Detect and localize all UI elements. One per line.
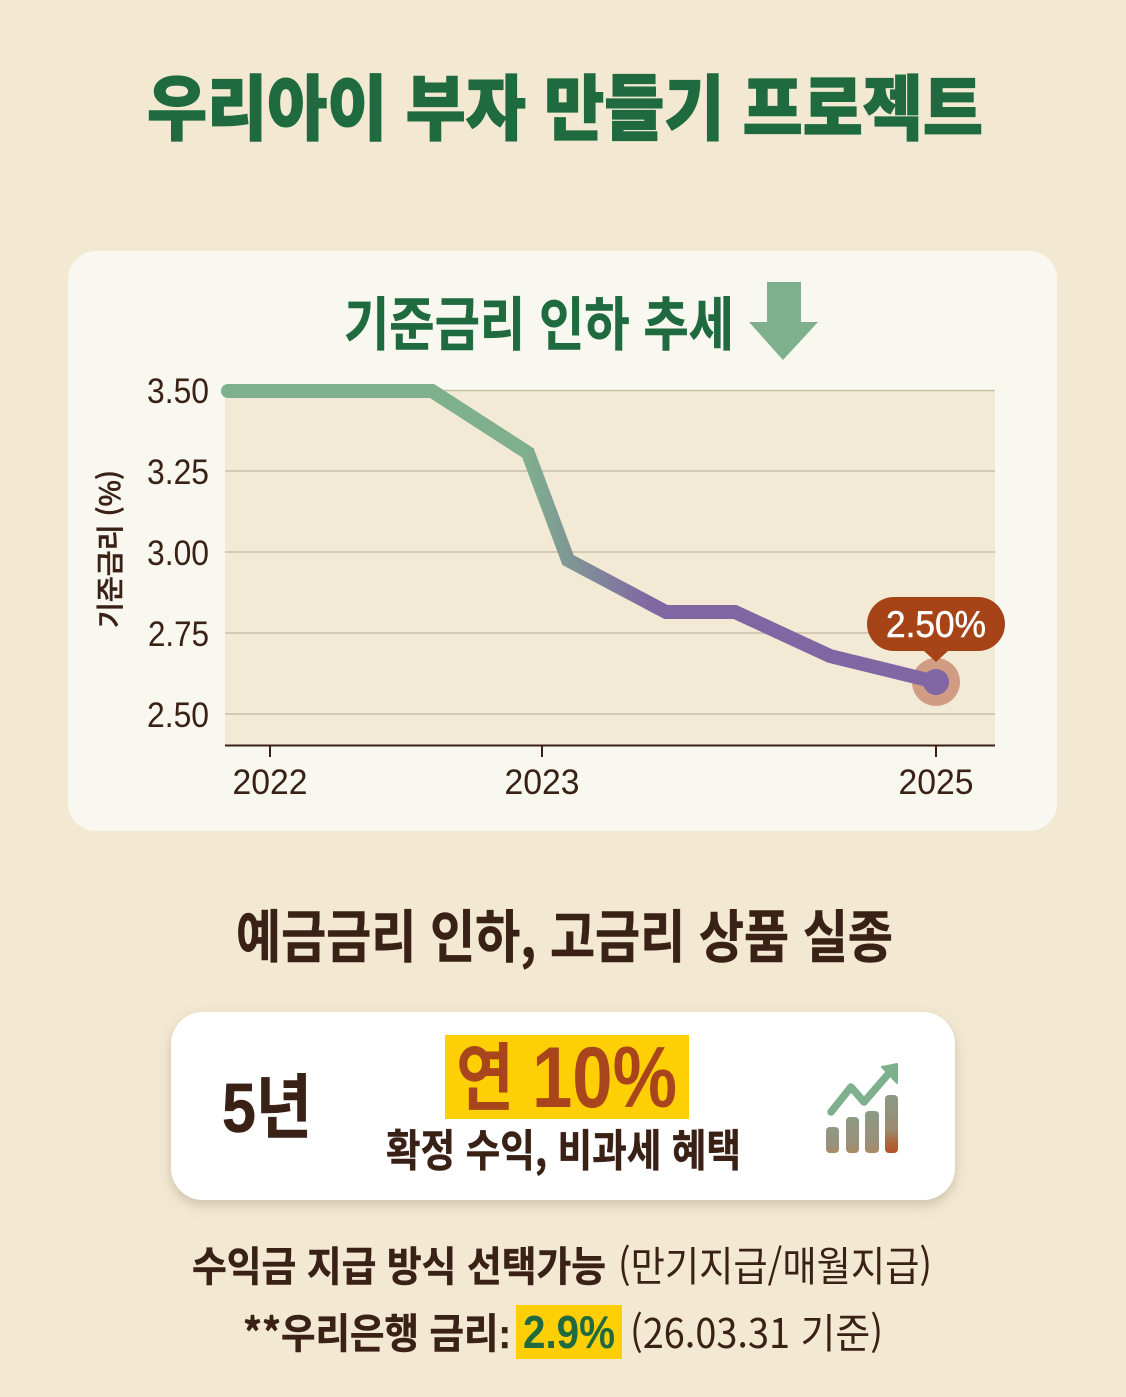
note: woori bank rate: **우리은행 금리: [243, 1300, 511, 1360]
x axis [225, 745, 995, 757]
term: 5 years: 5년 [222, 1069, 312, 1147]
y axis labels: 2.50 [147, 696, 209, 735]
highlight: annual 10%: 연 [456, 1019, 514, 1126]
note: woori bank rate [243, 1300, 883, 1360]
title: 우리아이 부자 만들기 프로젝트 [147, 53, 983, 155]
note: payout options: 수익금 지급 방식 선택가능 [192, 1233, 606, 1293]
icon: down arrow [749, 282, 818, 360]
y axis title: 기준금리 (%) [89, 470, 129, 628]
highlight: annual 10%: 10% [532, 1030, 677, 1126]
highlight: 2.9%: 2.9% [523, 1306, 615, 1358]
note: woori bank rate: (26.03.31 기준) [630, 1300, 883, 1360]
benefit text: 확정 수익, 비과세 혜택 [386, 1115, 741, 1179]
panel: base rate chart [68, 251, 1057, 831]
subtitle: 예금금리 인하, 고금리 상품 실종 [236, 892, 893, 974]
x axis labels: 2025 [898, 763, 974, 802]
marker dot [923, 669, 949, 695]
callout: 2.50%: 2.50% [886, 604, 986, 645]
y axis labels: 2.75 [148, 615, 209, 654]
x axis labels: 2022 [232, 763, 308, 802]
note: payout options [192, 1233, 932, 1293]
callout: 2.50% [867, 597, 1005, 662]
y axis labels: 3.25 [147, 453, 209, 492]
y axis labels: 3.00 [147, 534, 209, 573]
x axis labels [232, 763, 974, 802]
x axis labels: 2023 [504, 763, 580, 802]
rate line [228, 391, 936, 682]
icon: rising bar chart [826, 1064, 898, 1153]
chart heading: 기준금리 인하 추세 [344, 278, 734, 362]
panel: product card [171, 1012, 955, 1200]
y axis labels: 3.50 [147, 372, 209, 411]
line chart [89, 372, 1005, 802]
highlight: annual 10% [445, 1019, 689, 1126]
marker halo [912, 658, 960, 706]
note: payout options: (만기지급/매월지급) [618, 1233, 932, 1293]
y axis labels [147, 372, 209, 735]
